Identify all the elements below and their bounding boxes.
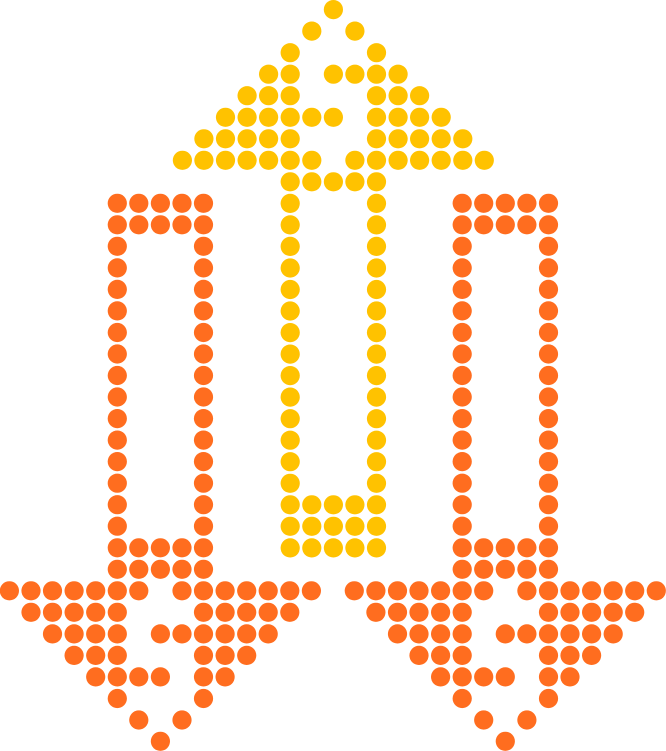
left orange arrowhead bbox=[0, 581, 321, 751]
left orange shaft bbox=[108, 194, 213, 579]
arrow: right orange down arrow bbox=[345, 194, 666, 751]
arrow: yellow up arrow bbox=[173, 0, 494, 557]
yellow arrowhead bbox=[173, 0, 494, 170]
right orange shaft bbox=[453, 194, 558, 579]
right orange arrowhead bbox=[345, 581, 666, 751]
arrow: left orange down arrow bbox=[0, 194, 321, 751]
yellow shaft bbox=[281, 172, 386, 557]
